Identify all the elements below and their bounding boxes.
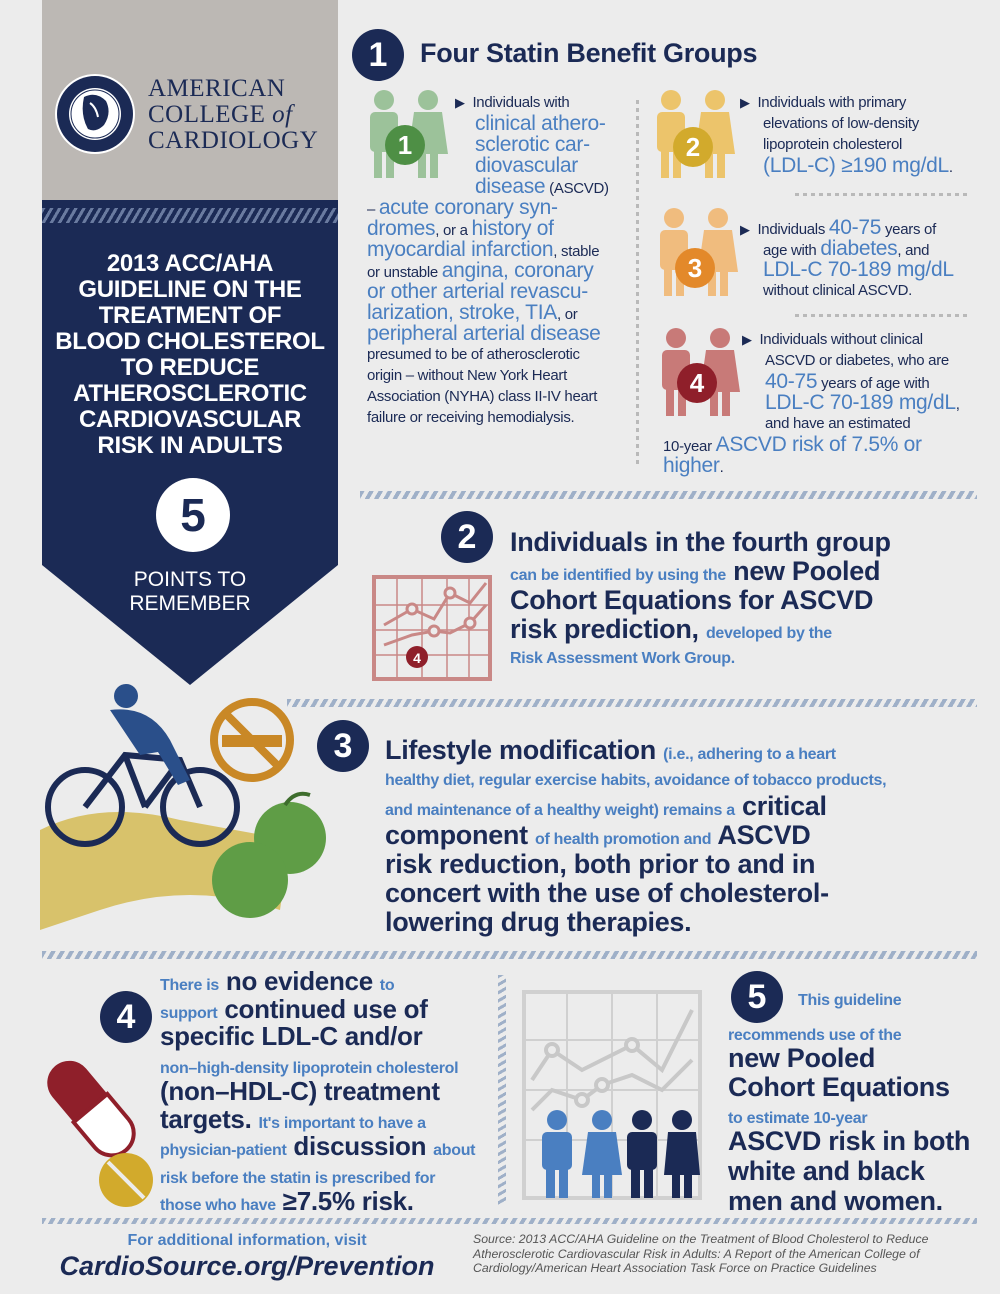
text: group 1: ▶ Individuals with	[455, 94, 569, 111]
title: TO REDUCE	[121, 354, 259, 381]
text: group 1: – acute coronary syn-	[367, 196, 558, 219]
text: group 1: larization, stroke, TIA, or	[367, 301, 577, 324]
logo text: COLLEGE of	[148, 101, 293, 128]
heading: section 5: white and black	[728, 1156, 925, 1186]
icon: group 2 people	[657, 90, 735, 178]
title: 2013 ACC/AHA	[107, 250, 273, 277]
icon: risk chart: 4	[413, 650, 421, 666]
text: group 1: failure or receiving hemodialysis.	[367, 409, 574, 426]
text: group 4: ASCVD or diabetes, who are	[765, 352, 949, 369]
text: group 1: Association (NYHA) class II-IV heart	[367, 388, 597, 405]
icon: group 3 people: 3	[688, 253, 702, 283]
subtitle: REMEMBER	[129, 592, 251, 615]
heading: section 2: Cohort Equations for ASCVD	[510, 585, 873, 615]
subtitle: POINTS TO	[134, 568, 246, 591]
text: group 3: LDL-C 70-189 mg/dL	[763, 258, 954, 281]
heading: section 3: Lifestyle modification (i.e., adhering to a heart	[385, 735, 836, 765]
footer: link: CardioSource.org/Prevention	[59, 1251, 435, 1281]
number 5 badge	[156, 478, 230, 552]
number 5 badge: 5	[180, 489, 206, 541]
text: group 1	[367, 94, 609, 426]
text: group 2	[740, 94, 953, 177]
text: group 1: peripheral arterial disease	[367, 322, 601, 345]
title	[55, 250, 325, 459]
heading: section 4: risk before the statin is prescribed for	[160, 1170, 435, 1186]
icon: group 1 people: 1	[398, 130, 412, 160]
text: group 4	[663, 331, 960, 477]
icon: pills	[47, 1060, 153, 1207]
logo text: CARDIOLOGY	[148, 127, 318, 154]
heading: section 5: Cohort Equations	[728, 1072, 950, 1102]
icon: group 4 people: 4	[690, 368, 705, 398]
divider dotted vertical section 4/5	[498, 975, 506, 1205]
heading: section 1	[352, 29, 757, 81]
text: group 1: or other arterial revascu-	[367, 280, 588, 303]
heading: section 5: ASCVD risk in both	[728, 1126, 970, 1156]
heading: section 1: 1	[369, 36, 387, 74]
icon: group 2 people: 2	[686, 132, 700, 162]
heading: section 5: new Pooled	[728, 1043, 875, 1073]
heading: section 5: recommends use of the	[728, 1027, 901, 1044]
text: group 1: origin – without New York Heart	[367, 367, 567, 384]
heading: section 5: This guideline	[798, 992, 901, 1009]
heading: section 5: to estimate 10-year	[728, 1110, 867, 1127]
text: group 2: elevations of low-density	[763, 115, 919, 132]
heading: section 3: 3	[334, 727, 352, 765]
text: group 4: LDL-C 70-189 mg/dL,	[765, 391, 960, 414]
heading: section 4: non–high-density lipoprotein cholesterol	[160, 1060, 458, 1076]
heading: section 3: healthy diet, regular exercise habits, avoidance of tobacco products,	[385, 772, 886, 789]
icon: chart with people	[522, 990, 702, 1200]
text: group 4: and have an estimated	[765, 415, 910, 432]
heading: section 3: concert with the use of cholesterol-	[385, 878, 829, 908]
text: group 2: ▶ Individuals with primary	[740, 94, 906, 111]
logo text: AMERICAN	[148, 75, 285, 102]
heading: section 4: specific LDL-C and/or	[160, 1021, 422, 1051]
heading: section 4: support continued use of	[160, 994, 428, 1024]
heading: section 3: risk reduction, both prior to and in	[385, 849, 815, 879]
heading: section 5: men and women.	[728, 1186, 943, 1216]
text: group 4: 10-year ASCVD risk of 7.5% or	[663, 433, 922, 456]
text: group 1: disease (ASCVD)	[475, 175, 609, 198]
heading: section 4: targets. It's important to have a	[160, 1104, 426, 1134]
text: group 1: clinical athero-	[475, 112, 606, 135]
text: group 3: age with diabetes, and	[763, 237, 929, 260]
footer: source: Source: 2013 ACC/AHA Guideline on the Treatment of Blood Cholesterol to Reduce Atherosclerotic Cardiovascular Risk in Adults: A Report of the American College of Cardiology/American Heart Association Task Force on Practice Guidelines	[473, 1232, 928, 1275]
footer: link	[59, 1232, 435, 1281]
heading: section 2: risk prediction, developed by the	[510, 614, 832, 644]
heading: section 2	[441, 511, 891, 667]
heading: section 4: 4	[117, 998, 135, 1036]
text: group 3: ▶ Individuals 40-75 years of	[740, 216, 936, 239]
text: group 3: without clinical ASCVD.	[763, 282, 912, 299]
text: group 2: (LDL-C) ≥190 mg/dL.	[763, 154, 953, 177]
text: group 1: or unstable angina, coronary	[367, 259, 593, 282]
text: group 4: ▶ Individuals without clinical	[742, 331, 923, 348]
text: group 4: 40-75 years of age with	[765, 370, 929, 393]
heading: section 3: and maintenance of a healthy weight) remains a critical	[385, 791, 827, 821]
text: group 4: higher.	[663, 454, 723, 477]
text: group 1: sclerotic car-	[475, 133, 590, 156]
heading: section 3	[317, 720, 886, 937]
illustration: cyclist, no smoking, tape, apples	[40, 684, 326, 930]
divider dotted vertical	[636, 100, 639, 466]
title: TREATMENT OF	[99, 302, 281, 329]
icon: ACC seal	[55, 74, 135, 154]
title: CARDIOVASCULAR	[79, 406, 301, 433]
text: group 1: myocardial infarction, stable	[367, 238, 599, 261]
heading: section 5: 5	[748, 978, 766, 1016]
heading: section 4: (non–HDL-C) treatment	[160, 1076, 440, 1106]
text: group 1: diovascular	[475, 154, 578, 177]
footer: link: For additional information, visit	[127, 1232, 367, 1249]
title: RISK IN ADULTS	[97, 432, 283, 459]
icon: group 1 people	[370, 90, 448, 178]
text: group 1: presumed to be of atherosclerotic	[367, 346, 580, 363]
title: GUIDELINE ON THE	[78, 276, 302, 303]
logo text	[148, 75, 318, 154]
heading: section 4: There is no evidence to	[160, 966, 394, 996]
title: BLOOD CHOLESTEROL	[55, 328, 325, 355]
heading: section 3: lowering drug therapies.	[385, 907, 691, 937]
heading: section 4: physician-patient discussion about	[160, 1131, 475, 1161]
heading: section 2: Risk Assessment Work Group.	[510, 650, 735, 667]
text: group 3	[740, 216, 954, 299]
title: ATHEROSCLEROTIC	[73, 380, 307, 407]
heading: section 2: can be identified by using the new Pooled	[510, 556, 880, 586]
heading: section 4	[100, 966, 476, 1216]
heading: section 3: component of health promotion and ASCVD	[385, 820, 810, 850]
heading: section 5	[728, 971, 970, 1216]
heading: section 4: those who have ≥7.5% risk.	[160, 1186, 414, 1216]
icon: group 4 people	[662, 328, 740, 416]
heading: section 2: Individuals in the fourth group	[510, 527, 891, 557]
heading: section 2: 2	[458, 518, 476, 556]
heading: section 1: Four Statin Benefit Groups	[420, 38, 757, 68]
text: group 2: lipoprotein cholesterol	[763, 136, 902, 153]
icon: group 3 people	[660, 208, 738, 296]
icon: risk chart	[372, 575, 492, 681]
text: group 1: dromes, or a history of	[367, 217, 554, 240]
subtitle	[129, 568, 251, 615]
panel: left header banner	[42, 0, 338, 685]
